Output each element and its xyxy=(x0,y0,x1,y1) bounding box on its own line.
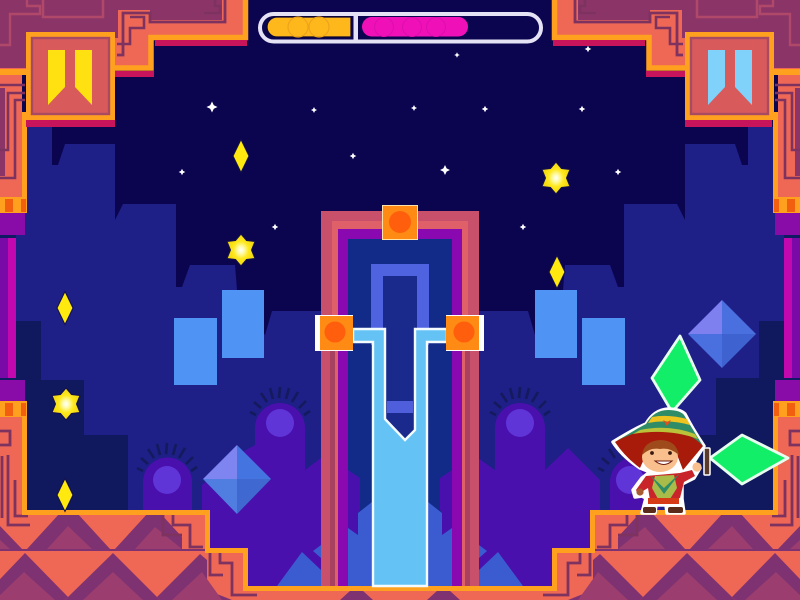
hat yellow stripe xyxy=(648,416,690,425)
frame: left half xyxy=(0,0,400,600)
magenta energy meter xyxy=(362,17,468,36)
boots xyxy=(643,507,656,513)
trousers xyxy=(648,498,679,504)
central gate xyxy=(321,211,479,586)
hat heart emblem xyxy=(663,420,671,426)
golden stars xyxy=(52,162,570,420)
hair xyxy=(642,440,679,455)
progress bar xyxy=(260,14,541,42)
gate inner blue frame xyxy=(371,264,429,345)
pause panel right xyxy=(685,34,772,127)
city skyline silhouette xyxy=(0,127,800,600)
character silhouette xyxy=(613,409,704,513)
white sparkle stars xyxy=(179,46,621,230)
hat lower stripe xyxy=(633,428,698,439)
gate inner purple hills xyxy=(348,470,452,535)
pause panel left xyxy=(26,34,115,127)
hat brim underside xyxy=(615,427,703,470)
hands xyxy=(636,488,644,496)
green kite gem right xyxy=(710,435,788,484)
crystal diamond right xyxy=(688,300,756,368)
orange node top xyxy=(382,206,418,240)
orange node left xyxy=(315,315,353,351)
smile xyxy=(655,461,672,464)
gate inner band xyxy=(387,401,413,413)
face xyxy=(642,442,678,472)
glowing water channel xyxy=(353,329,447,586)
blue floating blocks xyxy=(174,290,625,385)
tunic xyxy=(636,470,695,500)
character: explorer with hat xyxy=(613,409,710,513)
frame: right half xyxy=(400,0,800,600)
wand xyxy=(704,448,710,475)
gate inner panel xyxy=(383,276,417,436)
gate inner blue mounds xyxy=(348,502,452,586)
hat crown xyxy=(617,410,703,446)
orange energy meter xyxy=(267,17,351,37)
crystal diamond left xyxy=(203,445,271,514)
blue foreground mounds xyxy=(277,545,523,586)
orange node right xyxy=(446,315,484,351)
purple hills with domes xyxy=(137,387,660,586)
yellow diamonds xyxy=(57,140,565,512)
green kite gem top xyxy=(652,336,700,412)
